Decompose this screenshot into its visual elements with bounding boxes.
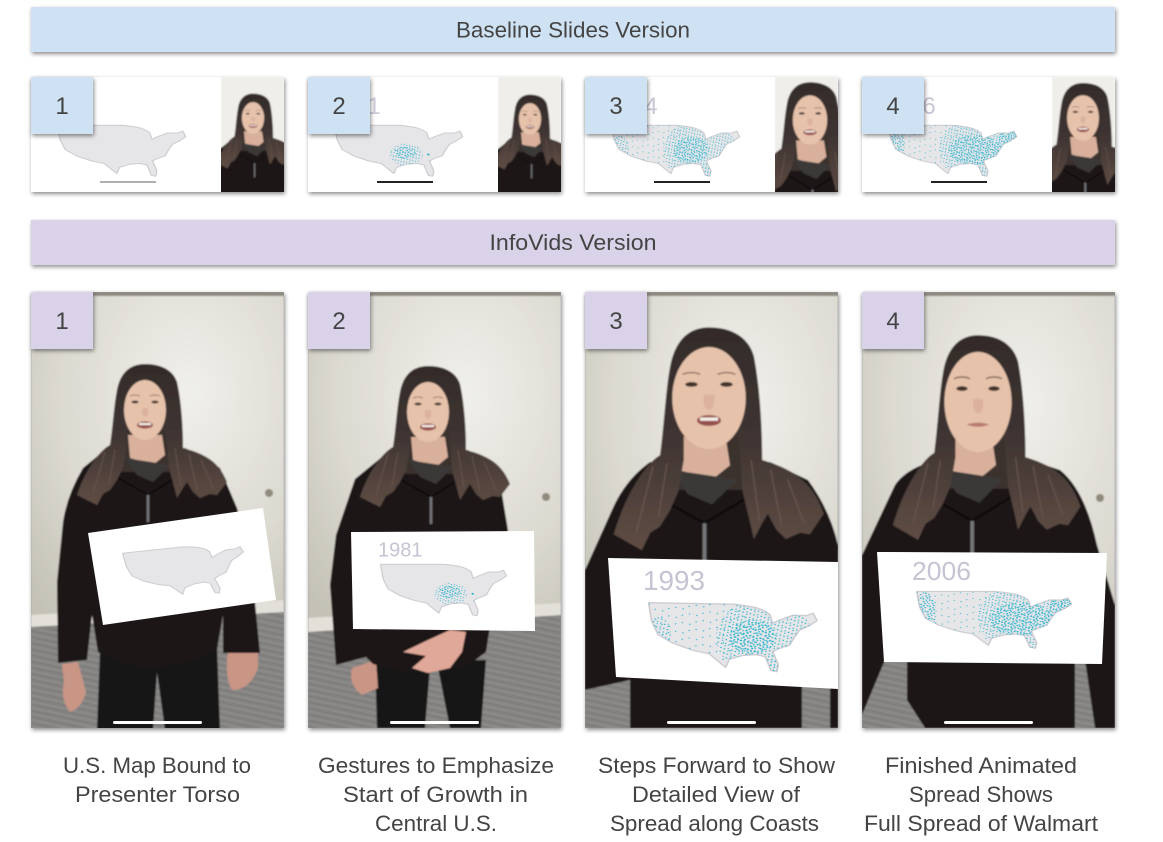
panel: baseline slide 3: 4: [644, 93, 658, 120]
caption 2: Start of Growth in: [343, 782, 528, 807]
floating map card: 1993: [643, 565, 705, 596]
caption 3: [598, 753, 835, 836]
panel: baseline slide 1: [28, 76, 288, 197]
heading bar: Baseline Slides Version: Baseline Slides Version: [456, 18, 690, 42]
panel: baseline slide 3: [582, 76, 842, 197]
panel: InfoVids frame 4: [862, 292, 1115, 728]
caption 1: [63, 753, 251, 807]
heading bar: InfoVids Version: [31, 220, 1115, 265]
panel: InfoVids frame 2: 2: [332, 308, 346, 335]
panel: baseline slide 3: 3: [609, 93, 623, 120]
panel: InfoVids frame 3: [585, 292, 838, 728]
caption 1: Presenter Torso: [75, 782, 240, 807]
floating map card: [351, 531, 535, 631]
floating map card: [608, 558, 838, 689]
slide 1 map: [58, 125, 186, 176]
slide 4 map: [887, 117, 1023, 180]
caption 3: Detailed View of: [632, 782, 801, 807]
floating map card: [877, 552, 1107, 664]
heading bar: Baseline Slides Version: [31, 7, 1115, 52]
slide 2 map: [335, 125, 463, 176]
panel: baseline slide 1: 1: [55, 93, 69, 120]
panel: InfoVids frame 4: 4: [886, 308, 900, 335]
heading bar: InfoVids Version: InfoVids Version: [490, 230, 656, 255]
panel: baseline slide 2: 1: [367, 93, 381, 120]
caption 2: Gestures to Emphasize: [318, 753, 554, 778]
floating map card: 2006: [912, 556, 971, 586]
panel: InfoVids frame 1: 1: [55, 308, 69, 335]
caption 3: Spread along Coasts: [610, 811, 819, 836]
caption 4: Finished Animated: [885, 753, 1077, 778]
caption 4: [864, 753, 1098, 836]
panel: baseline slide 4: [860, 76, 1119, 197]
panel: InfoVids frame 3: 3: [609, 308, 623, 335]
panel: baseline slide 2: [306, 76, 565, 197]
panel: baseline slide 4: 4: [886, 93, 900, 120]
floating map card: 1981: [378, 540, 422, 562]
caption 1: U.S. Map Bound to: [63, 753, 251, 778]
panel: baseline slide 4: 6: [922, 93, 936, 120]
caption 4: Full Spread of Walmart: [864, 811, 1098, 836]
panel: baseline slide 2: 2: [332, 93, 346, 120]
floating map card: [88, 508, 276, 625]
panel: InfoVids frame 1: [31, 292, 284, 730]
caption 4: Spread Shows: [909, 782, 1053, 807]
caption 2: Central U.S.: [375, 811, 497, 836]
slide 3 map: [611, 121, 740, 180]
panel: InfoVids frame 2: [308, 292, 561, 728]
caption 3: Steps Forward to Show: [598, 753, 835, 778]
caption 2: [318, 753, 554, 836]
